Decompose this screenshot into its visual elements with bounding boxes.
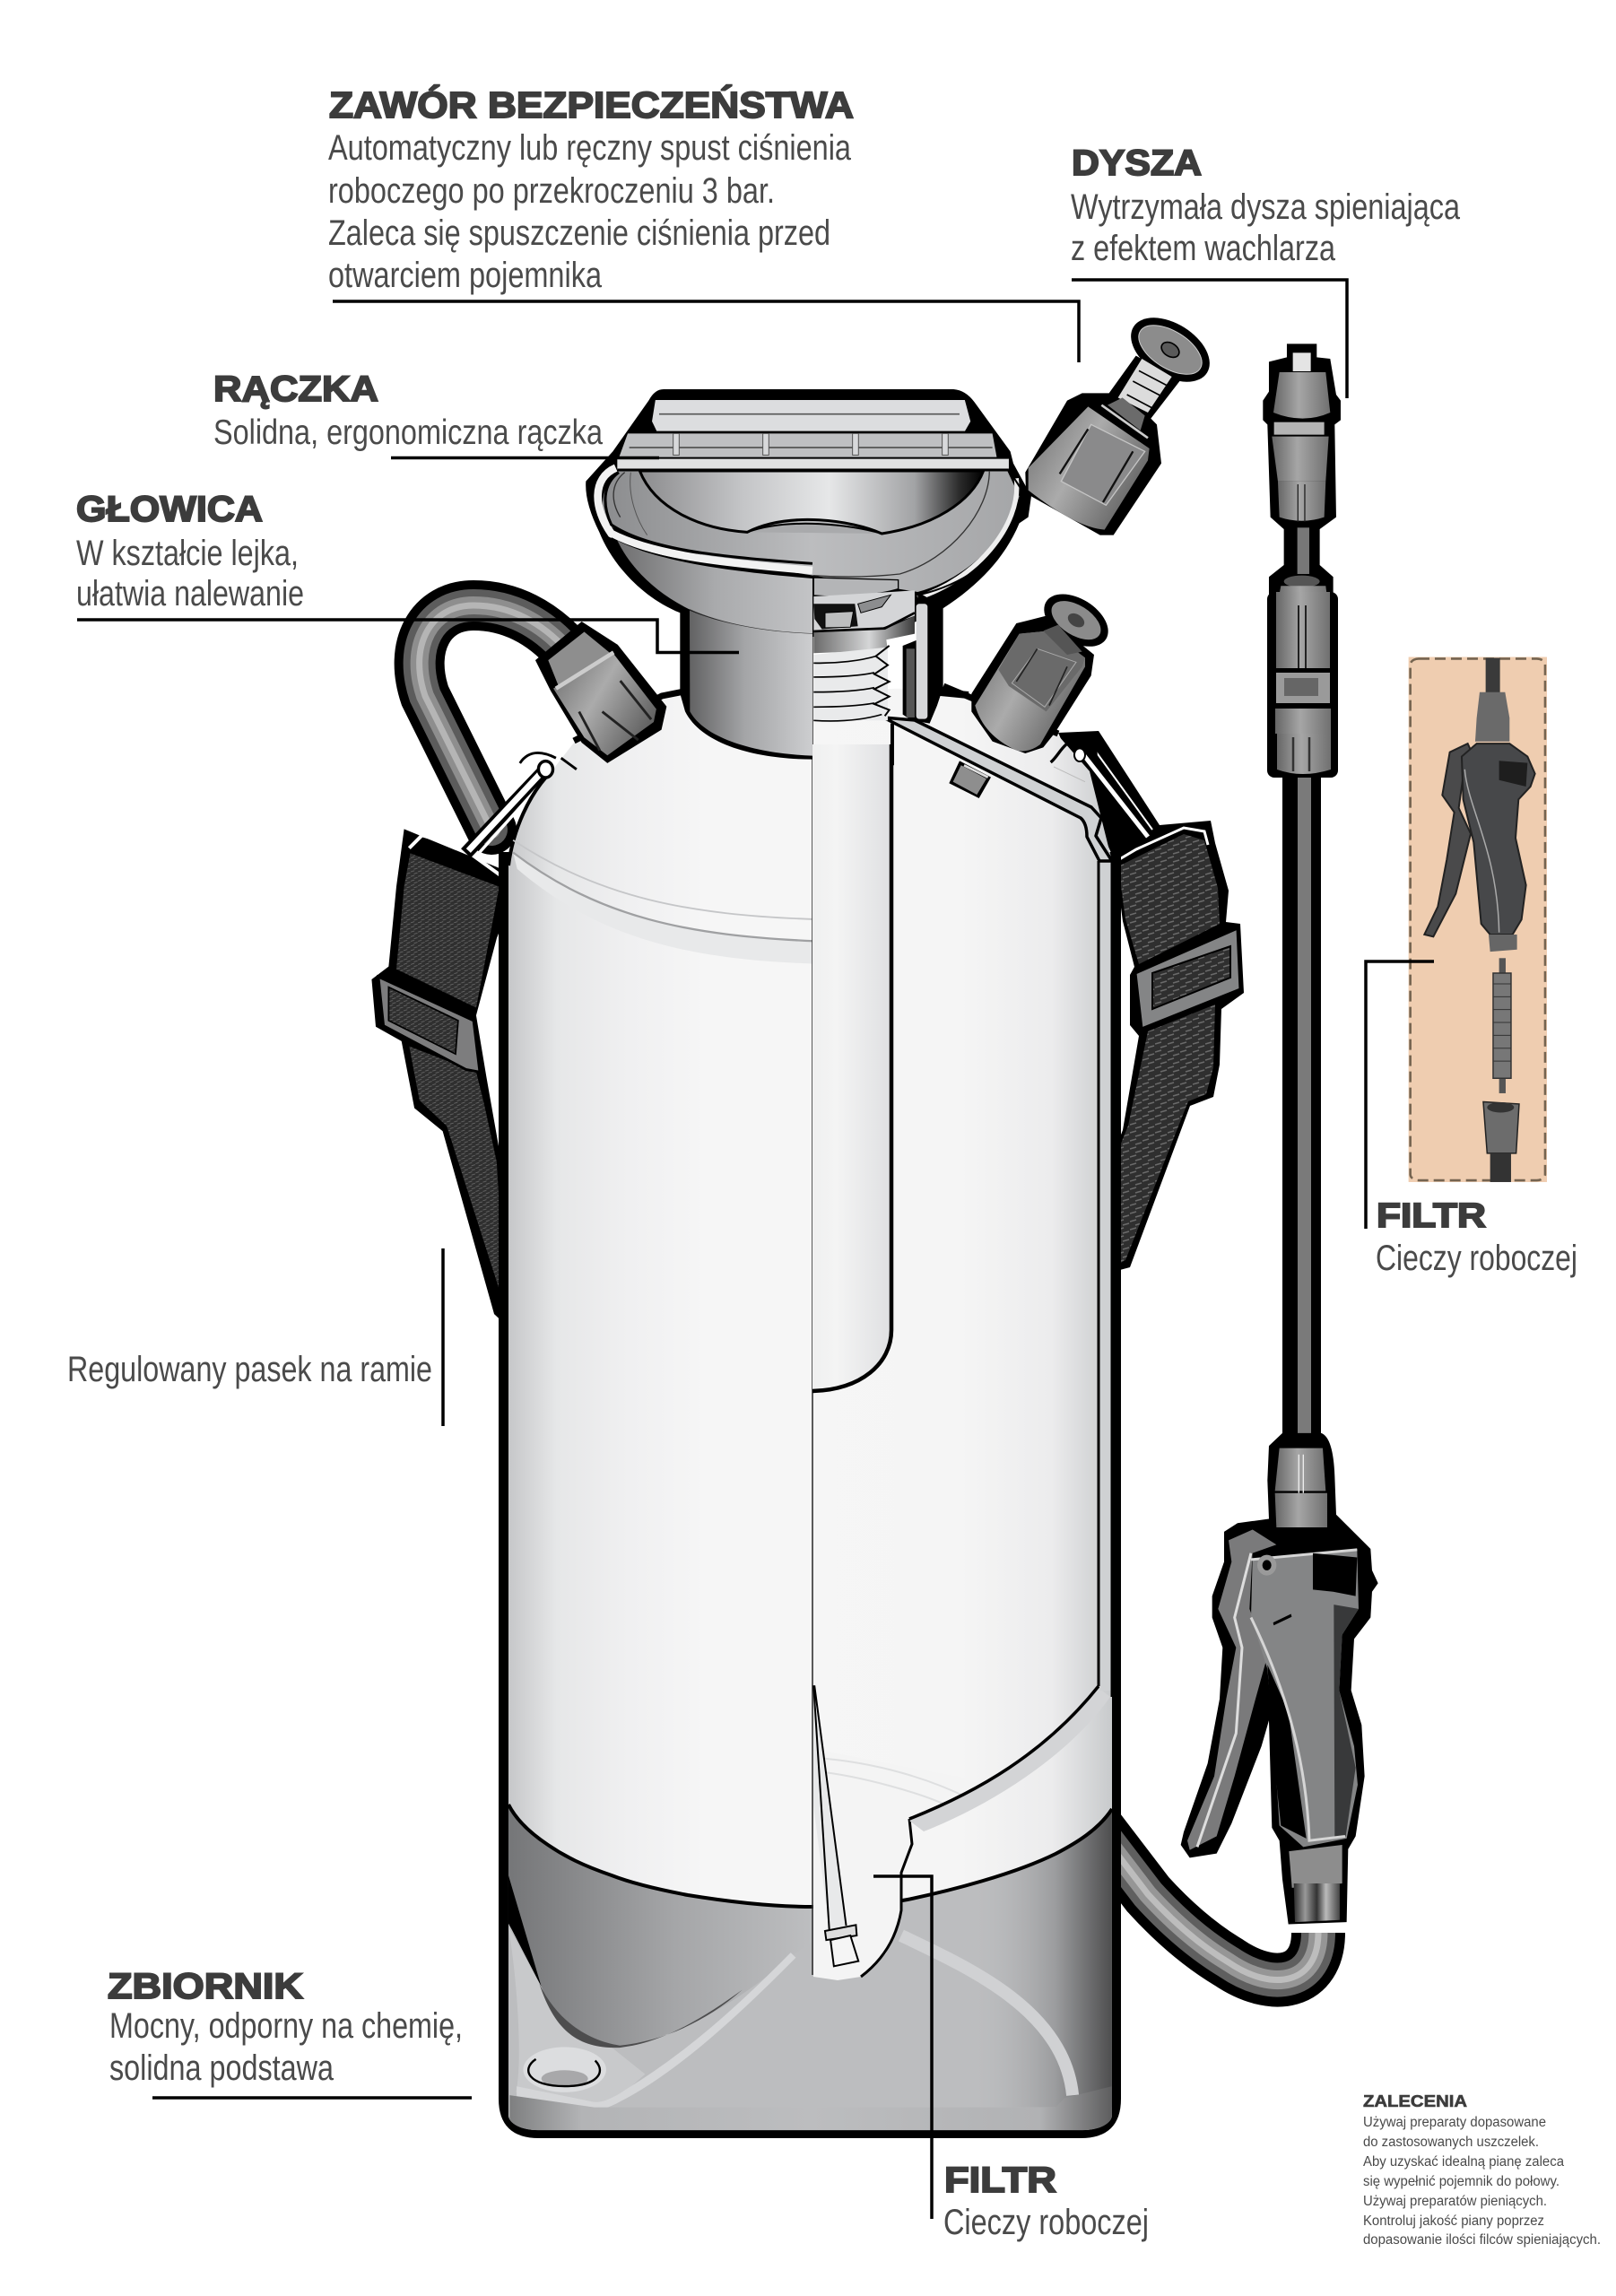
- buckle: [1135, 928, 1240, 1029]
- description: [328, 128, 852, 295]
- label: nozzle: [1071, 144, 1461, 268]
- description: roboczego po przekroczeniu 3 bar.: [328, 171, 775, 211]
- funnel interior: [603, 471, 1020, 592]
- label: shoulder strap: Regulowany pasek na ramie: [67, 1350, 432, 1389]
- inner tube: [812, 744, 891, 1391]
- rod: [1282, 771, 1321, 1453]
- heading: ZBIORNIK: [108, 1967, 303, 2006]
- description: Używaj preparatów pieniących.: [1363, 2194, 1547, 2209]
- spray wand: [1263, 344, 1341, 1453]
- buckle: [378, 977, 480, 1072]
- interior wall: [883, 718, 1112, 1831]
- handle underside: [639, 471, 984, 534]
- heading: FILTR: [1377, 1197, 1486, 1235]
- description: [109, 2006, 463, 2088]
- description: Mocny, odporny na chemię,: [109, 2006, 463, 2046]
- rim: [598, 468, 812, 570]
- description: Solidna, ergonomiczna rączka: [213, 413, 603, 452]
- description: [76, 534, 304, 613]
- label: handle: [213, 370, 603, 452]
- description: ułatwia nalewanie: [76, 574, 304, 613]
- nut body: [1029, 406, 1150, 530]
- label: bottom filter: [943, 2161, 1149, 2242]
- gun collar: [1275, 1448, 1327, 1527]
- description: Automatyczny lub ręczny spust ciśnienia: [328, 128, 852, 168]
- leader: tank: [152, 2096, 472, 2100]
- grip: [1251, 1549, 1359, 1847]
- heading: DYSZA: [1072, 144, 1202, 183]
- leader: bottom filter: [873, 1876, 932, 2219]
- hose nut, left: [535, 622, 666, 763]
- shoulder outline: [574, 686, 1058, 741]
- shoulder band lines: [513, 840, 812, 963]
- eyelet: [1051, 738, 1096, 782]
- description: otwarciem pojemnika: [328, 256, 603, 295]
- label: tank: [108, 1967, 463, 2088]
- heading: GŁOWICA: [76, 490, 263, 529]
- gun parts: [1424, 657, 1535, 952]
- left eyelet: [520, 752, 577, 778]
- description: Kontroluj jakość piany poprzez: [1363, 2213, 1544, 2229]
- heading: ZALECENIA: [1363, 2092, 1467, 2110]
- trigger lever: [1187, 1529, 1276, 1850]
- leader: nozzle: [1072, 280, 1347, 398]
- description: [1363, 2115, 1601, 2248]
- description: dopasowanie ilości filców spieniających.: [1363, 2232, 1601, 2248]
- tank funnel head: [586, 389, 1031, 765]
- threads: [1118, 359, 1172, 413]
- cut line: [812, 561, 813, 1975]
- safety valve nut: [937, 583, 1117, 798]
- description: do zastosowanych uszczelek.: [1363, 2135, 1539, 2150]
- black silhouette: [586, 389, 1031, 637]
- left shoulder strap: [371, 770, 548, 1329]
- tank shell: [499, 852, 1121, 2138]
- wand upper section: [1263, 344, 1341, 610]
- section through valve seat: [813, 578, 915, 765]
- description: Wytrzymała dysza spieniająca: [1071, 187, 1461, 227]
- leader: safety valve: [333, 301, 1079, 362]
- tank: [499, 561, 1121, 2138]
- collar below rim: [617, 541, 812, 634]
- base: [508, 1776, 1112, 2131]
- leader: handle: [391, 457, 659, 459]
- label: safety valve: [328, 84, 854, 295]
- neck: [680, 610, 812, 760]
- inset panel: filter detail: [1409, 657, 1547, 1182]
- socket and rod: [1483, 1102, 1519, 1182]
- small bolt: [949, 761, 991, 798]
- description: W kształcie lejka,: [76, 534, 299, 573]
- handle: [617, 399, 1009, 470]
- description: Używaj preparaty dopasowane: [1363, 2115, 1546, 2130]
- heading: FILTR: [944, 2161, 1056, 2200]
- right shoulder strap: [1058, 731, 1244, 1271]
- description: Aby uzyskać idealną pianę zaleca: [1363, 2154, 1564, 2170]
- leader: head: [77, 620, 739, 653]
- trigger gun: [1181, 1433, 1378, 1924]
- description: się wypełnić pojemnik do połowy.: [1363, 2174, 1560, 2189]
- white tank upper body: [508, 688, 1112, 1907]
- drain hole: [523, 2047, 606, 2092]
- interior cut-away funnel foot: [813, 1749, 977, 1980]
- wand lower section: [1267, 592, 1338, 778]
- vertical pipe: [903, 592, 943, 724]
- label: head: [76, 490, 304, 613]
- label: gun filter: [1376, 1197, 1577, 1278]
- delivery hose, right: [1099, 1830, 1318, 1980]
- top nozzle: [1025, 305, 1221, 535]
- recommendations: [1363, 2092, 1601, 2248]
- description: solidna podstawa: [109, 2048, 334, 2088]
- description: z efektem wachlarza: [1071, 229, 1336, 268]
- description: [1071, 187, 1461, 268]
- shoulder hose, left: [420, 605, 567, 830]
- heading: RĄCZKA: [213, 370, 378, 409]
- description: Cieczy roboczej: [943, 2203, 1149, 2242]
- leader: gun filter: [1366, 961, 1434, 1229]
- nozzle head: [1131, 316, 1210, 384]
- heading: ZAWÓR BEZPIECZEŃSTWA: [329, 84, 854, 126]
- mesh filter: [1493, 958, 1511, 1093]
- leader: shoulder strap: [441, 1248, 445, 1426]
- description: Zaleca się spuszczenie ciśnienia przed: [328, 213, 830, 253]
- dip tube with filter: [813, 1685, 858, 1966]
- gun lower fitting: [1289, 1845, 1342, 1922]
